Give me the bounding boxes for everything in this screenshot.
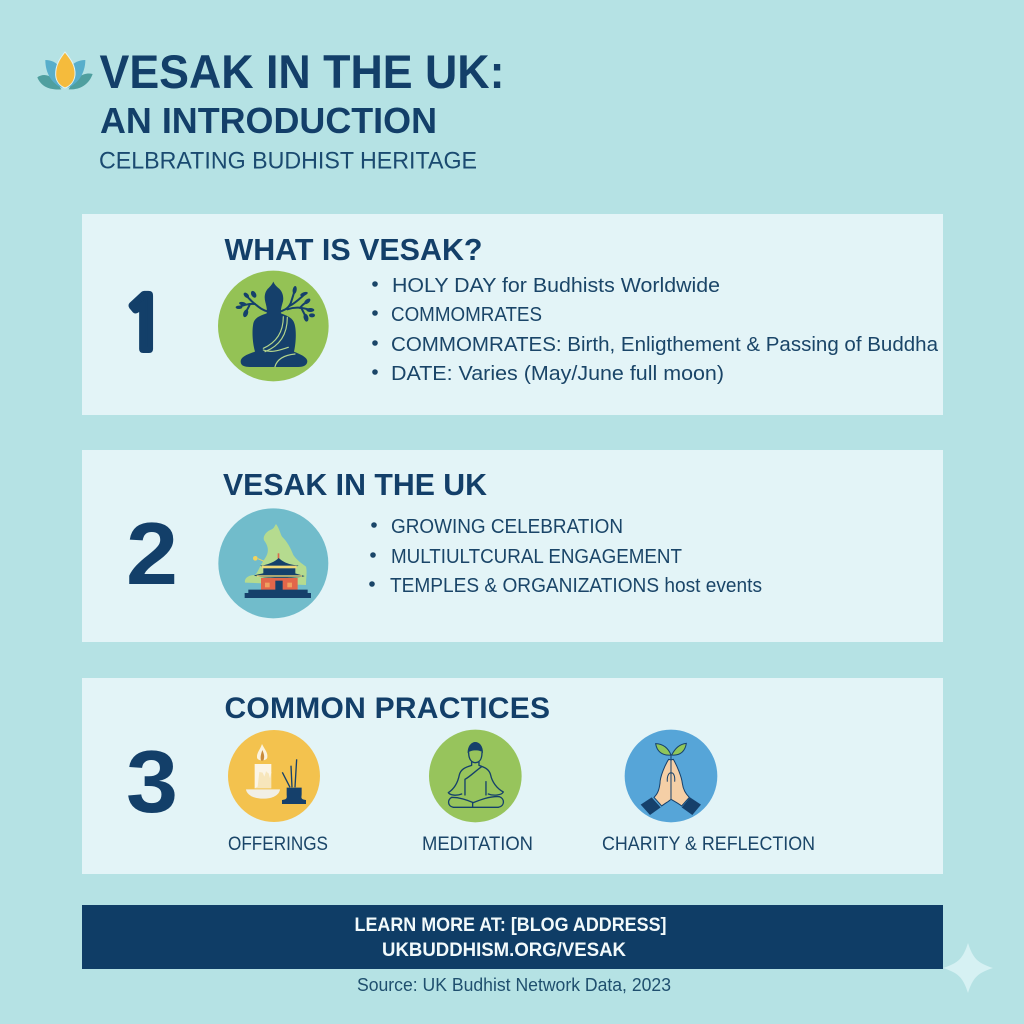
- panel: common practices: [82, 678, 943, 874]
- bullet list: uk celebrations: [369, 516, 762, 597]
- label: offerings: OFFERINGS: [228, 834, 328, 855]
- practice: offerings: [228, 730, 328, 855]
- bullet list: what is vesak: COMMOMRATES: [391, 304, 542, 326]
- bullet list: uk celebrations: TEMPLES & ORGANIZATIONS host events: [390, 575, 762, 597]
- subtitle: an introduction: AN INTRODUCTION: [100, 100, 437, 141]
- bullet list: what is vesak: COMMOMRATES: Birth, Enligthement & Passing of Buddha: [391, 334, 939, 356]
- number 2: 2: [126, 504, 178, 603]
- icon: candle and incense: [228, 730, 320, 822]
- tagline: CELBRATING BUDHIST HERITAGE: [99, 148, 477, 174]
- heading: what is vesak: WHAT IS VESAK?: [224, 232, 482, 267]
- icon: praying hands with sprout: [625, 730, 717, 822]
- bullet list: uk celebrations: MULTIULTCURAL ENGAGEMENT: [391, 546, 682, 568]
- footer banner: [82, 905, 943, 969]
- bullet list: what is vesak: DATE: Varies (May/June full moon): [391, 363, 724, 385]
- source note: Source: UK Budhist Network Data, 2023: [357, 975, 671, 995]
- web address: UKBUDDHISM.ORG/VESAK: [382, 940, 626, 961]
- icon: sparkle: [943, 943, 993, 993]
- header: [37, 45, 504, 174]
- panel: what is vesak: [82, 214, 943, 415]
- heading: common practices: COMMON PRACTICES: [224, 692, 550, 725]
- bullet list: what is vesak: HOLY DAY for Budhists Worldwide: [392, 275, 720, 297]
- panel: vesak in the uk: [82, 450, 943, 642]
- practice: charity and reflection: [602, 730, 815, 855]
- icon: lotus: [37, 52, 93, 89]
- label: charity and reflection: CHARITY & REFLECTION: [602, 834, 815, 855]
- icon: buddha under bodhi tree: [218, 271, 329, 381]
- bullet list: uk celebrations: GROWING CELEBRATION: [391, 516, 623, 538]
- call to action: LEARN MORE AT: [BLOG ADDRESS]: [354, 915, 666, 936]
- icon: meditating figure outline: [429, 730, 522, 822]
- icon: uk map and temple: [218, 508, 328, 618]
- bullet list: what is vesak: [372, 275, 939, 385]
- number 3: 3: [126, 732, 178, 831]
- heading: vesak in the uk: VESAK IN THE UK: [223, 467, 488, 502]
- number 1: 1: [122, 289, 167, 362]
- label: meditation: MEDITATION: [422, 834, 533, 855]
- title: VESAK IN THE UK:: [100, 45, 504, 98]
- practice: meditation: [422, 730, 533, 855]
